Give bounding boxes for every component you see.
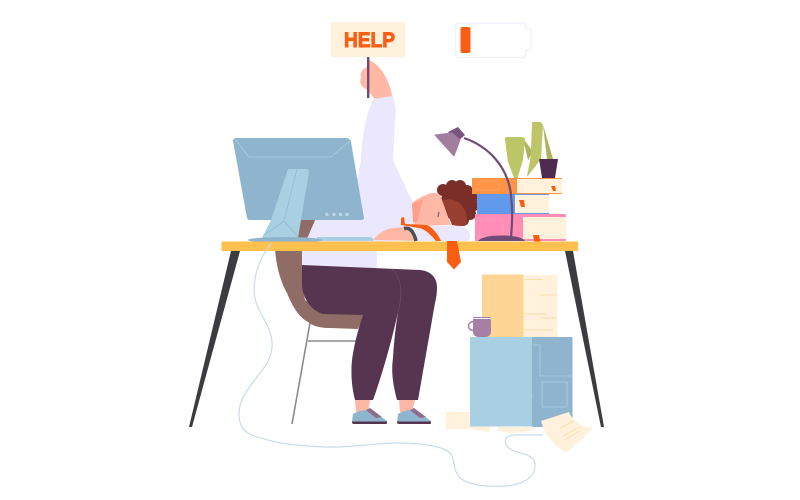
cabinet side xyxy=(532,337,572,427)
folder cover xyxy=(482,274,524,337)
curly hair xyxy=(437,180,478,226)
chair back between monitor and desk xyxy=(298,218,316,241)
monitor xyxy=(233,138,373,243)
battery outline xyxy=(456,23,531,58)
filing cabinet xyxy=(470,337,572,427)
trousers xyxy=(302,265,437,400)
hair inner xyxy=(442,199,467,226)
sleeping arm under head xyxy=(415,226,470,241)
paper left xyxy=(446,412,490,432)
watch xyxy=(404,228,416,241)
low battery icon xyxy=(456,23,531,58)
mug xyxy=(468,317,491,337)
top orange book xyxy=(472,178,562,194)
cabinet front xyxy=(470,337,533,426)
hand holding sign xyxy=(360,60,392,99)
stacked folder on cabinet xyxy=(482,274,558,337)
lamp head xyxy=(448,127,465,142)
lamp arm xyxy=(464,138,512,238)
middle blue book xyxy=(477,194,549,214)
desk lamp xyxy=(435,127,525,241)
floor papers xyxy=(446,412,535,433)
right shoe xyxy=(397,408,431,424)
tie collar xyxy=(401,217,441,241)
cable over desk edge xyxy=(265,243,272,253)
monitor body xyxy=(233,138,364,220)
desk xyxy=(189,242,604,427)
bottom pink book xyxy=(475,214,566,245)
left shoe xyxy=(352,408,387,424)
lamp shade xyxy=(435,133,460,156)
help text: HELP xyxy=(344,29,395,52)
person xyxy=(302,60,478,424)
stand base xyxy=(248,237,322,243)
desk legs xyxy=(189,251,604,427)
raised arm and torso xyxy=(302,96,424,270)
help sign xyxy=(330,22,406,57)
book stack xyxy=(472,178,566,245)
stick of sign xyxy=(367,57,369,98)
lamp base xyxy=(478,236,525,241)
folder pages xyxy=(524,275,558,337)
pot xyxy=(539,159,558,178)
power cable xyxy=(239,242,543,486)
loose sheet of paper xyxy=(541,412,593,452)
monitor buttons xyxy=(325,213,349,216)
ankles xyxy=(355,400,415,412)
plant xyxy=(505,122,558,183)
keyboard xyxy=(317,237,373,241)
leaves xyxy=(523,138,533,160)
face xyxy=(412,193,451,226)
monitor stand xyxy=(262,169,309,238)
chair legs xyxy=(292,323,357,424)
desk top xyxy=(222,242,578,251)
battery charge xyxy=(460,27,470,53)
chair xyxy=(275,218,366,424)
paper middle xyxy=(497,427,535,433)
hanging tie xyxy=(447,241,461,270)
hand on desk xyxy=(373,227,417,241)
chair seat and back xyxy=(275,218,366,329)
